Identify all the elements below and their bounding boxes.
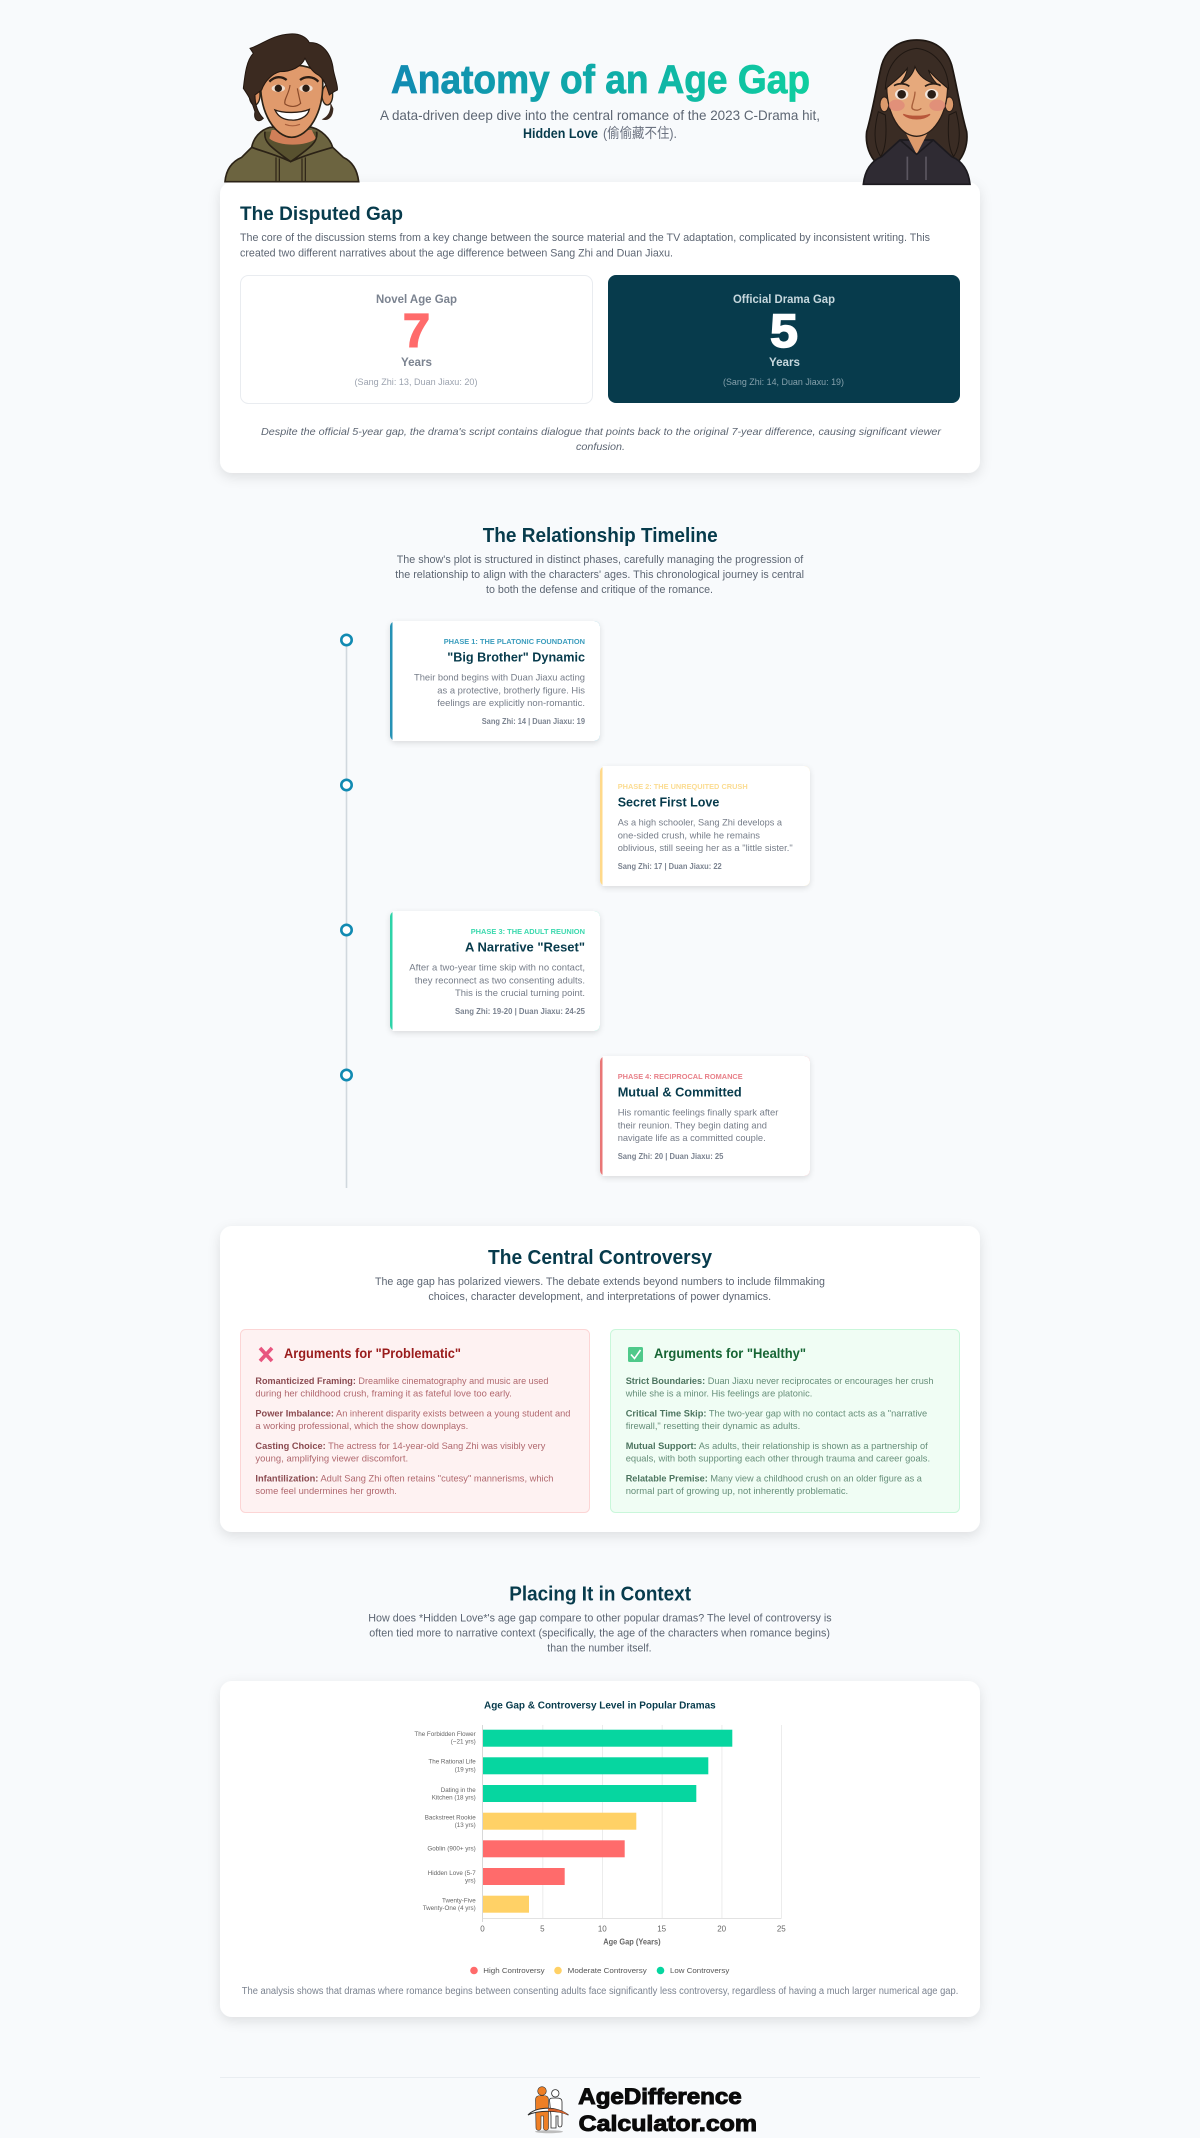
y axis labels: Goblin (900+ yrs): [427, 1845, 476, 1852]
intro text: [395, 554, 804, 596]
bar: The Rational Life: [483, 1757, 708, 1774]
heading: The Disputed Gap: [240, 204, 403, 225]
stat card: novel age gap: Years: [401, 355, 432, 369]
note: Despite the official 5-year gap, the drama's script contains dialogue that points back to the original 7-year difference, causing significant viewer: [261, 426, 942, 438]
bar: The Forbidden Flower: [483, 1730, 732, 1747]
icon: female character: [863, 40, 970, 184]
legend: Moderate Controversy: [568, 1966, 647, 1975]
card: phase 1: Sang Zhi: 14 | Duan Jiaxu: 19: [482, 717, 586, 726]
argument list: a working professional, which the show downplays.: [255, 1421, 468, 1432]
card: phase 3: Sang Zhi: 19-20 | Duan Jiaxu: 24-25: [455, 1007, 586, 1016]
legend: High Controversy: [483, 1966, 545, 1975]
argument list: firewall," resetting their dynamic as adults.: [626, 1421, 800, 1432]
y axis labels: The Forbidden Flower: [414, 1731, 476, 1738]
x axis labels: 0: [480, 1925, 485, 1934]
card: phase 2: PHASE 2: THE UNREQUITED CRUSH: [618, 782, 748, 791]
card: phase 3: [390, 911, 600, 1031]
argument list: some feel undermines her growth.: [255, 1486, 397, 1497]
card: phase 2: [600, 766, 810, 886]
intro text: than the number itself.: [547, 1643, 652, 1655]
y axis labels: [414, 1731, 476, 1912]
intro text: the relationship to align with the characters' ages. This chronological journey is central: [395, 569, 804, 581]
intro text: choices, character development, and interpretations of power dynamics.: [428, 1291, 771, 1303]
argument list: young, amplifying viewer discomfort.: [255, 1453, 408, 1464]
legend: [470, 1966, 730, 1975]
card: phase 2: As a high schooler, Sang Zhi develops a: [618, 818, 783, 829]
timeline dot: [341, 925, 352, 935]
section: the relationship timeline: [341, 525, 810, 1188]
timeline axis: [341, 635, 352, 1188]
card: phase 3: PHASE 3: THE ADULT REUNION: [471, 927, 585, 936]
card: phase 1: "Big Brother" Dynamic: [447, 650, 585, 665]
argument list: equals, with both supporting each other through trauma and career goals.: [626, 1453, 930, 1464]
chart title: Age Gap & Controversy Level in Popular Dramas: [484, 1700, 716, 1712]
card: phase 4: [600, 1056, 810, 1176]
card: phase 1: [390, 621, 600, 741]
x axis labels: 25: [777, 1925, 786, 1934]
intro text: created two different narratives about the age difference between Sang Zhi and Duan Jiaxu.: [240, 248, 673, 260]
title: Anatomy of an Age Gap: [391, 58, 810, 102]
heading: The Central Controversy: [488, 1247, 713, 1269]
card: phase 4: His romantic feelings finally spark after: [618, 1108, 778, 1119]
y axis labels: Dating in the: [441, 1787, 476, 1794]
card: phase 4: their reunion. They begin dating and: [618, 1120, 767, 1131]
caption: The analysis shows that dramas where romance begins between consenting adults face significantly less controversy, regardless of having a much larger numerical age gap.: [242, 1986, 958, 1997]
card: phase 3: This is the crucial turning point.: [455, 988, 585, 999]
card: phase 1: as a protective, brotherly figure. His: [437, 685, 585, 696]
argument list: [255, 1376, 570, 1497]
card: phase 2: one-sided crush, while he remains: [618, 830, 760, 841]
subtitle: [380, 107, 820, 141]
subtitle: (偷偷藏不住).: [603, 125, 677, 141]
bar: Backstreet Rookie: [483, 1813, 636, 1830]
argument list: Power Imbalance: An inherent disparity exists between a young student and: [255, 1409, 570, 1420]
intro text: [240, 232, 930, 260]
stat card: novel age gap: (Sang Zhi: 13, Duan Jiaxu: 20): [354, 377, 478, 388]
logo text: [578, 2084, 757, 2136]
argument list: Romanticized Framing: Dreamlike cinematography and music are used: [255, 1376, 548, 1387]
card: phase 3: they reconnect as two consenting adults.: [415, 975, 585, 986]
argument list: Critical Time Skip: The two-year gap with no contact acts as a "narrative: [626, 1409, 927, 1420]
heading: The Relationship Timeline: [483, 525, 718, 547]
x axis labels: [480, 1925, 786, 1934]
bar chart: [414, 1725, 786, 1947]
heading: Arguments for "Healthy": [654, 1346, 806, 1361]
timeline dot: [341, 1070, 352, 1080]
stat card: official drama gap: 5: [770, 304, 798, 357]
footer logo: [528, 2084, 757, 2136]
intro text: The show's plot is structured in distinct phases, carefully managing the progression of: [397, 554, 804, 566]
y axis labels: Twenty-One (4 yrs): [423, 1905, 476, 1912]
icon: logo figures: [528, 2087, 568, 2133]
logo text: Calculator.com: [579, 2111, 757, 2136]
x axis labels: 10: [598, 1925, 607, 1934]
legend: Low Controversy: [670, 1966, 730, 1975]
intro text: often tied more to narrative context (specifically, the age of the characters when romance begins): [369, 1628, 830, 1640]
card: phase 3: A Narrative "Reset": [465, 940, 585, 955]
intro text: [368, 1613, 832, 1655]
section: placing it in context: [368, 1584, 832, 1655]
logo text: AgeDifference: [578, 2084, 742, 2109]
note: confusion.: [576, 441, 625, 453]
y axis labels: yrs): [465, 1878, 476, 1885]
argument list: Infantilization: Adult Sang Zhi often retains "cutesy" mannerisms, which: [255, 1474, 553, 1485]
subtitle: A data-driven deep dive into the central romance of the 2023 C-Drama hit,: [380, 107, 820, 123]
card: phase 2: Sang Zhi: 17 | Duan Jiaxu: 22: [618, 862, 722, 871]
stat card: official drama gap: Years: [769, 355, 800, 369]
argument list: Mutual Support: As adults, their relationship is shown as a partnership of: [626, 1441, 928, 1452]
stat card: official drama gap: [608, 275, 960, 403]
stat card: official drama gap: Official Drama Gap: [733, 292, 835, 306]
argument list: normal part of growing up, not inherently problematic.: [626, 1486, 848, 1497]
timeline dot: [341, 780, 352, 790]
card: phase 1: feelings are explicitly non-romantic.: [437, 698, 585, 709]
stat card: official drama gap: (Sang Zhi: 14, Duan Jiaxu: 19): [723, 377, 844, 388]
card: phase 2: Secret First Love: [618, 795, 719, 810]
panel: the central controversy: [220, 1226, 980, 1532]
subtitle: Hidden Love: [523, 125, 598, 141]
icon: check mark: [628, 1347, 643, 1362]
x axis labels: 5: [540, 1925, 545, 1934]
x axis labels: 15: [657, 1925, 667, 1934]
intro text: to both the defense and critique of the romance.: [486, 584, 713, 596]
intro text: The age gap has polarized viewers. The debate extends beyond numbers to include filmmaking: [375, 1276, 825, 1288]
stat card: novel age gap: [240, 276, 592, 404]
argument list: Casting Choice: The actress for 14-year-old Sang Zhi was visibly very: [255, 1441, 546, 1452]
icon: cross: [260, 1348, 272, 1361]
y axis labels: Backstreet Rookie: [425, 1814, 476, 1821]
panel: arguments for problematic: [240, 1330, 590, 1512]
argument list: [625, 1376, 934, 1497]
stat card: novel age gap: Novel Age Gap: [376, 292, 457, 306]
card: phase 2: oblivious, still seeing her as a "little sister.": [618, 843, 793, 854]
card: phase 3: After a two-year time skip with no contact,: [409, 963, 585, 974]
panel: chart card: [220, 1681, 980, 2017]
argument list: during her childhood crush, framing it as fateful love too early.: [255, 1388, 512, 1399]
bar: Twenty-Five Twenty-One: [483, 1896, 529, 1913]
intro text: The core of the discussion stems from a key change between the source material and the TV adaptation, complicated by inconsistent writing. This: [240, 232, 930, 244]
y axis labels: The Rational Life: [428, 1759, 476, 1766]
x axis title: Age Gap (Years): [603, 1938, 661, 1947]
argument list: while she is a minor. His feelings are platonic.: [625, 1388, 812, 1399]
x axis labels: 20: [717, 1925, 727, 1934]
intro text: [375, 1276, 825, 1303]
timeline dot: [341, 635, 352, 645]
card: phase 4: PHASE 4: RECIPROCAL ROMANCE: [618, 1072, 743, 1081]
bar: Dating in the Kitchen: [483, 1785, 696, 1802]
card: phase 1: PHASE 1: THE PLATONIC FOUNDATION: [444, 637, 585, 646]
panel: the disputed gap: [220, 182, 980, 473]
y axis labels: Twenty-Five: [442, 1898, 476, 1905]
card: phase 4: Sang Zhi: 20 | Duan Jiaxu: 25: [618, 1152, 724, 1161]
stat card: novel age gap: 7: [403, 304, 430, 357]
panel: arguments for healthy: [610, 1330, 960, 1512]
y axis labels: Hidden Love (5-7: [428, 1870, 476, 1877]
bar: Goblin: [483, 1840, 625, 1857]
y axis labels: (~21 yrs): [451, 1739, 476, 1746]
bar: Hidden Love: [483, 1868, 565, 1885]
card: phase 4: navigate life as a committed couple.: [618, 1133, 766, 1144]
heading: Arguments for "Problematic": [284, 1346, 461, 1361]
card: phase 4: Mutual & Committed: [618, 1085, 742, 1100]
argument list: Strict Boundaries: Duan Jiaxu never reciprocates or encourages her crush: [626, 1376, 934, 1387]
icon: male character: [225, 34, 359, 182]
y axis labels: (19 yrs): [455, 1766, 476, 1773]
intro text: How does *Hidden Love*'s age gap compare to other popular dramas? The level of controversy is: [368, 1613, 832, 1625]
note: [261, 426, 942, 453]
heading: Placing It in Context: [509, 1584, 691, 1606]
y axis labels: Kitchen (18 yrs): [432, 1794, 476, 1801]
argument list: Relatable Premise: Many view a childhood crush on an older figure as a: [626, 1474, 923, 1485]
card: phase 1: Their bond begins with Duan Jiaxu acting: [414, 673, 585, 684]
y axis labels: (13 yrs): [455, 1822, 476, 1829]
header: [380, 58, 820, 141]
